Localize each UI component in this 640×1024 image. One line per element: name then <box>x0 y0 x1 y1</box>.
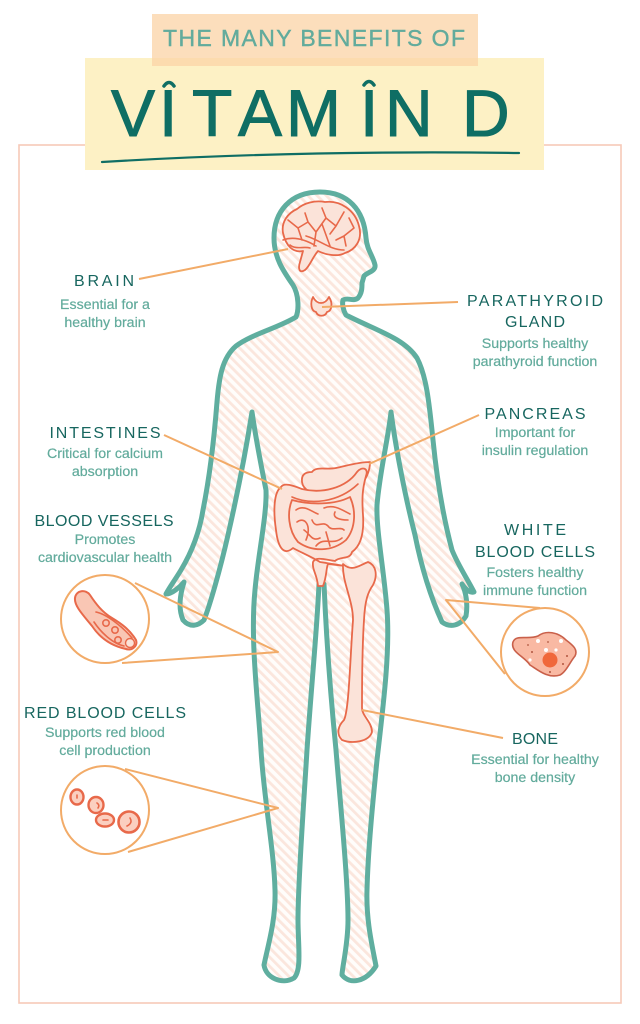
label: bone <box>471 731 600 786</box>
label: blood vessels: BLOOD VESSELS <box>34 513 174 530</box>
title background <box>85 58 544 170</box>
label: white blood cells <box>475 522 595 599</box>
label: pancreas: PANCREAS <box>484 406 586 423</box>
label: red blood cells: cell production <box>59 743 151 759</box>
label: blood vessels <box>34 513 174 566</box>
bone <box>338 562 376 742</box>
title banner <box>85 14 544 170</box>
label: blood vessels: Promotes <box>75 532 135 548</box>
callout: white blood cells <box>501 608 589 696</box>
subtitle band <box>152 14 478 66</box>
outer frame <box>19 145 621 1003</box>
pointer: blood vessels <box>122 583 278 663</box>
label: parathyroid gland: parathyroid function <box>473 354 597 370</box>
label: intestines: Critical for calcium <box>47 446 163 462</box>
label: intestines: INTESTINES <box>50 425 160 442</box>
pointer: bone <box>362 710 503 738</box>
subtitle: THE MANY BENEFITS OF <box>163 25 465 51</box>
label: white blood cells: Fosters healthy <box>486 565 584 581</box>
label: parathyroid gland: PARATHYROID <box>467 293 603 310</box>
organ: intestines <box>274 469 367 586</box>
pointer: red blood cells <box>125 769 278 852</box>
label: red blood cells <box>24 705 186 759</box>
label: blood vessels: cardiovascular health <box>38 550 172 566</box>
label: brain <box>60 273 150 331</box>
label: pancreas: insulin regulation <box>482 443 588 459</box>
label: white blood cells: immune function <box>483 583 587 599</box>
organ: thyroid <box>311 297 331 316</box>
label: intestines: absorption <box>72 464 138 480</box>
label: parathyroid gland <box>467 293 603 370</box>
label: pancreas <box>482 406 588 459</box>
label: red blood cells: RED BLOOD CELLS <box>24 705 186 722</box>
label: parathyroid gland: GLAND <box>505 314 565 331</box>
pointer: white blood cells <box>446 600 540 674</box>
label: brain: BRAIN <box>74 273 134 290</box>
label: brain: healthy brain <box>64 315 146 331</box>
label: bone: bone density <box>495 770 576 786</box>
organ: pancreas and stomach <box>302 462 370 496</box>
label: intestines <box>47 425 163 480</box>
label: brain: Essential for a <box>60 297 150 313</box>
label: white blood cells: BLOOD CELLS <box>475 544 595 561</box>
title underline <box>102 152 519 162</box>
label: bone: Essential for healthy <box>471 752 600 768</box>
label: parathyroid gland: Supports healthy <box>482 336 589 352</box>
pointer: parathyroid <box>322 302 458 307</box>
callout: red blood cells <box>61 766 149 854</box>
pointer: brain <box>139 249 288 279</box>
pointer: pancreas <box>369 415 479 464</box>
label: red blood cells: Supports red blood <box>45 725 165 741</box>
label: bone: BONE <box>512 731 558 748</box>
pointer: intestines <box>164 435 282 489</box>
callout: blood vessels <box>61 575 149 663</box>
label: white blood cells: WHITE <box>504 522 566 539</box>
title letter accents <box>164 82 374 86</box>
body figure <box>166 192 474 981</box>
label: pancreas: Important for <box>495 425 575 441</box>
organ: brain <box>283 201 360 271</box>
main title: VITAMIN D <box>111 76 510 150</box>
